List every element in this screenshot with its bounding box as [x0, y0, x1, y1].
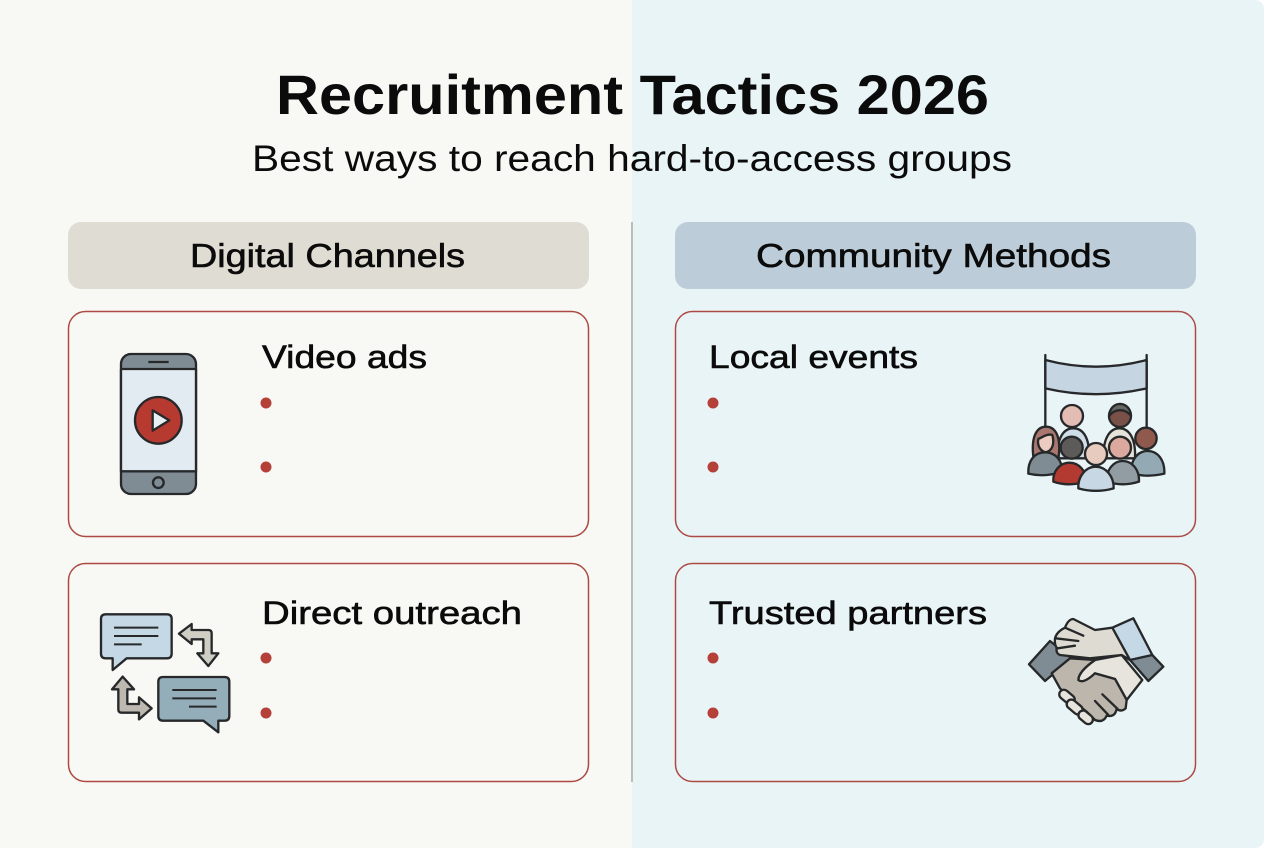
- bullets: [260, 652, 272, 718]
- bullets: [708, 652, 718, 718]
- heading: community methods: Community Methods: [756, 237, 1111, 274]
- card heading: local events: Local events: [709, 339, 918, 375]
- card: local events: [676, 312, 1196, 536]
- card heading: trusted partners: Trusted partners: [709, 595, 987, 631]
- bullets: [260, 398, 272, 472]
- icon: crowd under banner: [1028, 355, 1164, 491]
- background: right half: [632, 0, 1264, 848]
- card: direct outreach: [68, 564, 588, 782]
- background: left half: [0, 0, 632, 848]
- heading: digital channels: [68, 222, 589, 289]
- icon: chat bubbles with arrows: [101, 614, 229, 732]
- panel: digital channels: [68, 222, 589, 782]
- icon: handshake: [1029, 618, 1163, 726]
- card heading: direct outreach: Direct outreach: [262, 595, 522, 631]
- heading: community methods: [675, 222, 1196, 289]
- card: trusted partners: [676, 564, 1196, 782]
- card heading: video ads: Video ads: [262, 339, 427, 375]
- card: video ads: [68, 312, 588, 536]
- panel: community methods: [675, 222, 1196, 782]
- title: Recruitment Tactics 2026: [276, 63, 989, 126]
- subtitle: Best ways to reach hard-to-access groups: [252, 138, 1012, 179]
- icon: phone with play button: [121, 354, 196, 494]
- bullets: [708, 398, 718, 472]
- heading: digital channels: Digital Channels: [190, 237, 465, 274]
